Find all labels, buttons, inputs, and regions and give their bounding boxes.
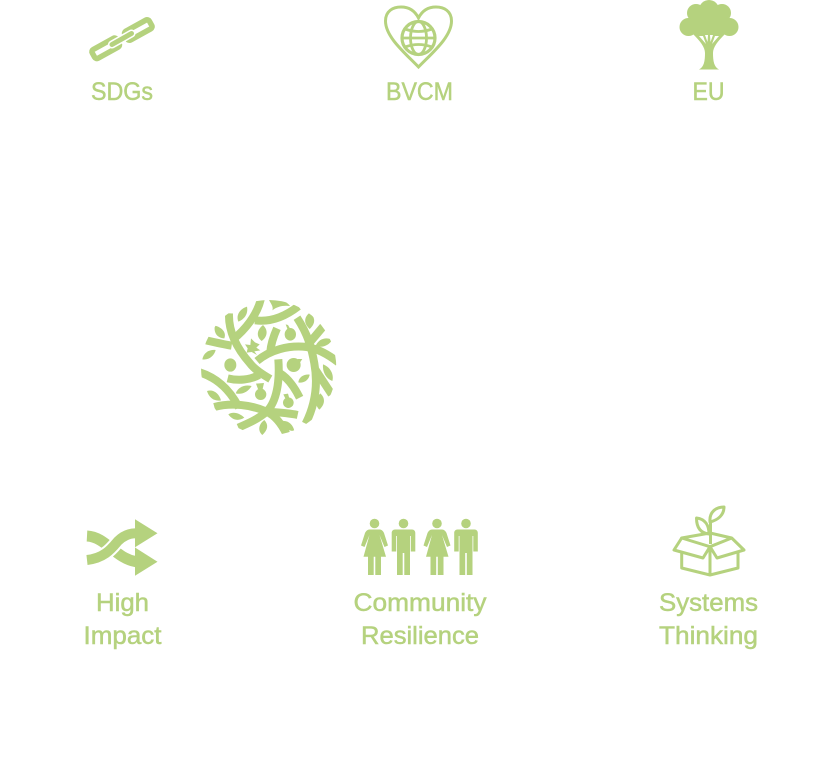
label: EU: EU [692, 78, 724, 106]
label: BVCM: BVCM [386, 78, 453, 106]
label: Systems Thinking: Systems [659, 589, 758, 617]
label: High Impact: Impact [84, 622, 162, 650]
branches [200, 298, 338, 437]
icon: box with sprout [674, 507, 744, 575]
man 2 [454, 519, 478, 575]
label: SDGs: SDGs [91, 78, 153, 106]
icon: heart with globe [386, 7, 452, 67]
fruit and small shapes [224, 324, 302, 408]
icon: tree [680, 0, 738, 70]
icon: crossing arrows [87, 519, 158, 576]
icon: chain link [91, 19, 153, 59]
man 1 [392, 519, 415, 575]
label: Community Resilience: Resilience [361, 622, 479, 650]
icon: four people [361, 519, 478, 575]
woman 1 [361, 519, 388, 575]
label: Community Resilience [354, 589, 487, 650]
label: Systems Thinking: Thinking [659, 622, 758, 650]
label: Community Resilience: Community [354, 589, 487, 617]
woman 2 [424, 519, 450, 575]
label: High Impact [84, 589, 162, 650]
label: Systems Thinking [659, 589, 758, 650]
leaves [202, 300, 333, 435]
emblem: circular tree of branches, leaves and fruit [200, 298, 338, 437]
label: High Impact: High [96, 589, 149, 617]
